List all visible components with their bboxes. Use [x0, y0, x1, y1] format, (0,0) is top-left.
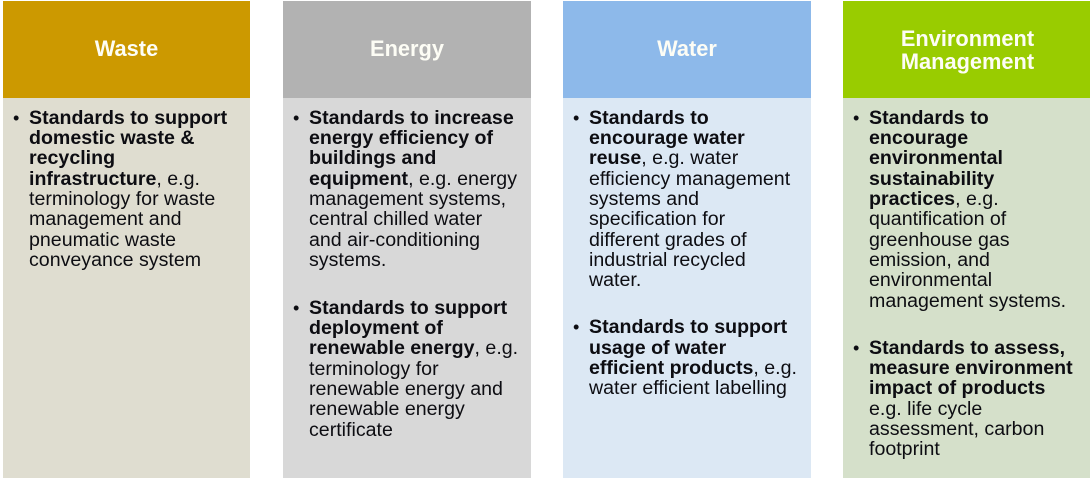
text block: water efficient product standards: usage of water — [589, 337, 726, 359]
text block: water reuse standards: different grades of — [589, 229, 747, 251]
text block: water reuse standards: water. — [589, 269, 641, 291]
panel body: environment management — [843, 98, 1090, 478]
text block: renewable energy standards: deployment of — [309, 317, 443, 339]
text block: product impact standards: measure environment — [869, 357, 1073, 379]
heading: environment management: Management — [901, 48, 1034, 74]
text block: sustainability practice standards — [853, 107, 1066, 312]
text block: water reuse standards: specification for — [589, 208, 725, 230]
text block: product impact standards: impact of products — [869, 377, 1045, 399]
text block: water efficient product standards: Standards to support — [589, 316, 787, 338]
panel: environment management — [843, 1, 1090, 478]
panel: energy — [283, 1, 531, 478]
text block: sustainability practice standards: Standards to — [869, 107, 989, 129]
text block: energy efficiency standards: and air-conditioning — [309, 229, 480, 251]
text block: sustainability practice standards: emission, and — [869, 249, 990, 271]
text block: product impact standards: footprint — [869, 438, 940, 460]
text block: water efficient product standards: water efficient labelling — [589, 377, 787, 399]
panel: water: • — [573, 317, 579, 337]
heading: waste — [3, 1, 250, 98]
text block: water reuse standards: encourage water — [589, 127, 745, 149]
text block: sustainability practice standards: practices, e.g. — [869, 188, 999, 210]
text block: product impact standards — [853, 336, 1073, 460]
text block: waste standards: management and — [29, 208, 182, 230]
text block: sustainability practice standards: environmental — [869, 269, 992, 291]
text block: product impact standards: Standards to assess, — [869, 336, 1065, 358]
text block: water reuse standards: efficiency management — [589, 168, 790, 190]
heading: energy: Energy — [370, 36, 444, 61]
text block: waste standards: domestic waste & — [29, 127, 195, 149]
text block: renewable energy standards: certificate — [309, 419, 393, 441]
text block: water reuse standards: systems and — [589, 188, 699, 210]
text block: renewable energy standards: renewable energy — [309, 398, 465, 420]
text block: energy efficiency standards: Standards to increase — [309, 107, 514, 129]
panel: energy: • — [293, 108, 299, 128]
text block: water reuse standards: reuse, e.g. water — [589, 147, 738, 169]
text block: renewable energy standards: terminology for — [309, 358, 439, 380]
text block: energy efficiency standards: energy efficiency of — [309, 127, 493, 149]
text block: renewable energy standards: renewable energy and — [309, 378, 503, 400]
text block: waste standards: Standards to support — [29, 107, 227, 129]
text block: sustainability practice standards: management systems. — [869, 290, 1066, 312]
panel body: waste — [3, 98, 250, 478]
panel body: energy — [283, 98, 531, 478]
panel body: water — [563, 98, 811, 478]
text block: water reuse standards: Standards to — [589, 107, 709, 129]
panel: waste — [3, 1, 250, 478]
text block: sustainability practice standards: encourage — [869, 127, 968, 149]
text block: water efficient product standards: efficient products, e.g. — [589, 357, 797, 379]
heading: waste: Waste — [95, 36, 158, 61]
text block: renewable energy standards — [293, 297, 518, 441]
text block: waste standards: infrastructure, e.g. — [29, 168, 200, 190]
text block: energy efficiency standards: systems. — [309, 249, 386, 271]
text block: waste standards: conveyance system — [29, 249, 201, 271]
heading: water: Water — [657, 36, 717, 61]
text block: sustainability practice standards: quantification of — [869, 208, 1006, 230]
heading: water — [563, 1, 811, 98]
text block: energy efficiency standards: equipment, e.g. energy — [309, 168, 517, 190]
panel: energy: • — [293, 298, 299, 318]
text block: sustainability practice standards: environmental — [869, 147, 1003, 169]
panel: environment management: • — [853, 338, 859, 358]
text block: waste standards — [13, 107, 227, 271]
text block: energy efficiency standards: central chilled water — [309, 208, 482, 230]
text block: sustainability practice standards: sustainability — [869, 168, 994, 190]
panel: environment management: • — [853, 108, 859, 128]
text block: product impact standards: e.g. life cycle — [869, 398, 982, 420]
text block: water reuse standards: industrial recycled — [589, 249, 746, 271]
text block: renewable energy standards: Standards to support — [309, 297, 507, 319]
panel: water: • — [573, 108, 579, 128]
heading: environment management — [843, 1, 1090, 98]
panel: waste: • — [13, 108, 19, 128]
text block: water reuse standards — [573, 107, 790, 291]
text block: waste standards: pneumatic waste — [29, 229, 176, 251]
text block: energy efficiency standards: buildings and — [309, 147, 436, 169]
text block: energy efficiency standards — [293, 107, 517, 271]
text block: product impact standards: assessment, carbon — [869, 418, 1044, 440]
heading: energy — [283, 1, 531, 98]
panel: water — [563, 1, 811, 478]
text block: water efficient product standards — [573, 316, 797, 399]
text block: energy efficiency standards: management systems, — [309, 188, 506, 210]
text block: waste standards: recycling — [29, 147, 115, 169]
text block: sustainability practice standards: greenhouse gas — [869, 229, 1010, 251]
heading: environment management: Environment — [901, 26, 1034, 50]
text block: renewable energy standards: renewable energy, e.g. — [309, 337, 518, 359]
text block: waste standards: terminology for waste — [29, 188, 215, 210]
